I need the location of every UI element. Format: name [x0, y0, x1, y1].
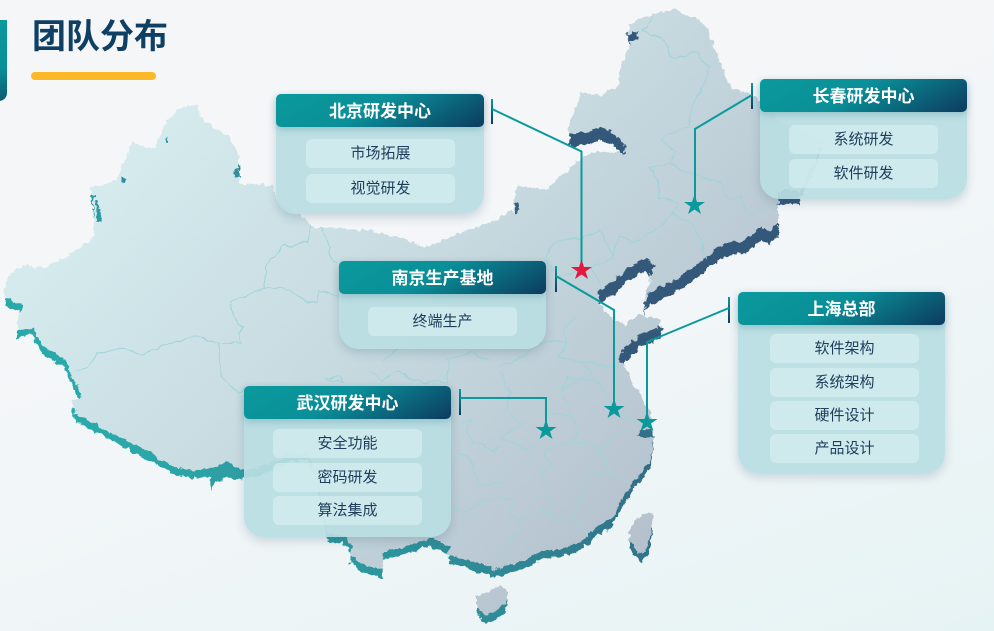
lakes and bays	[90, 31, 654, 438]
star: 南京	[604, 398, 624, 418]
star: 北京	[571, 260, 592, 279]
item: 软件研发	[833, 165, 894, 182]
land mass	[5, 10, 822, 616]
item	[789, 159, 938, 188]
panel heading	[738, 292, 945, 325]
panel heading: 北京研发中心	[329, 102, 431, 121]
item	[789, 125, 938, 154]
item	[273, 463, 422, 492]
panel: 南京生产基地	[339, 261, 546, 349]
item: 系统架构	[814, 374, 874, 391]
panel: 武汉研发中心	[244, 386, 451, 537]
panel heading	[244, 386, 451, 419]
southern tibet relief notch	[210, 466, 243, 490]
item	[273, 496, 422, 525]
item: 安全功能	[317, 435, 378, 452]
corner tab accent	[0, 20, 7, 101]
panel heading: 上海总部	[808, 300, 876, 319]
connector: 北京研发中心	[491, 99, 582, 268]
item: 系统研发	[833, 131, 894, 148]
item: 终端生产	[412, 313, 472, 330]
panel heading: 武汉研发中心	[296, 394, 398, 413]
item: 硬件设计	[814, 407, 874, 424]
star: 上海	[636, 412, 658, 431]
connector: 武汉研发中心	[459, 389, 546, 430]
item	[306, 139, 455, 168]
panel: 北京研发中心	[276, 94, 484, 214]
map land and coastal relief	[5, 10, 822, 624]
connector: 长春研发中心	[695, 83, 753, 203]
item: 视觉研发	[350, 180, 410, 197]
title underline	[31, 72, 156, 80]
panel heading	[760, 79, 967, 112]
item: 市场拓展	[350, 145, 410, 162]
item	[770, 434, 919, 463]
title: 团队分布	[32, 18, 168, 56]
coastal relief edge	[5, 18, 822, 624]
connector: 上海总部	[647, 297, 730, 420]
panel heading	[276, 94, 484, 127]
item	[770, 334, 919, 363]
item	[770, 401, 919, 430]
panel heading: 长春研发中心	[812, 87, 914, 106]
star: 武汉	[536, 420, 556, 439]
item: 密码研发	[317, 469, 378, 486]
province borders	[77, 18, 777, 555]
item: 产品设计	[814, 440, 874, 457]
item	[368, 307, 517, 336]
item: 软件架构	[814, 340, 874, 357]
panel heading	[339, 261, 546, 294]
item	[273, 429, 422, 458]
item	[770, 368, 919, 397]
item: 算法集成	[317, 502, 378, 519]
panel: 长春研发中心	[760, 79, 967, 199]
item	[306, 174, 455, 203]
thicker north-east relief edge	[568, 136, 800, 364]
connector: 南京生产基地	[555, 266, 614, 408]
star: 长春	[684, 194, 705, 214]
panel heading: 南京生产基地	[392, 269, 494, 288]
panel: 上海总部	[738, 292, 945, 473]
